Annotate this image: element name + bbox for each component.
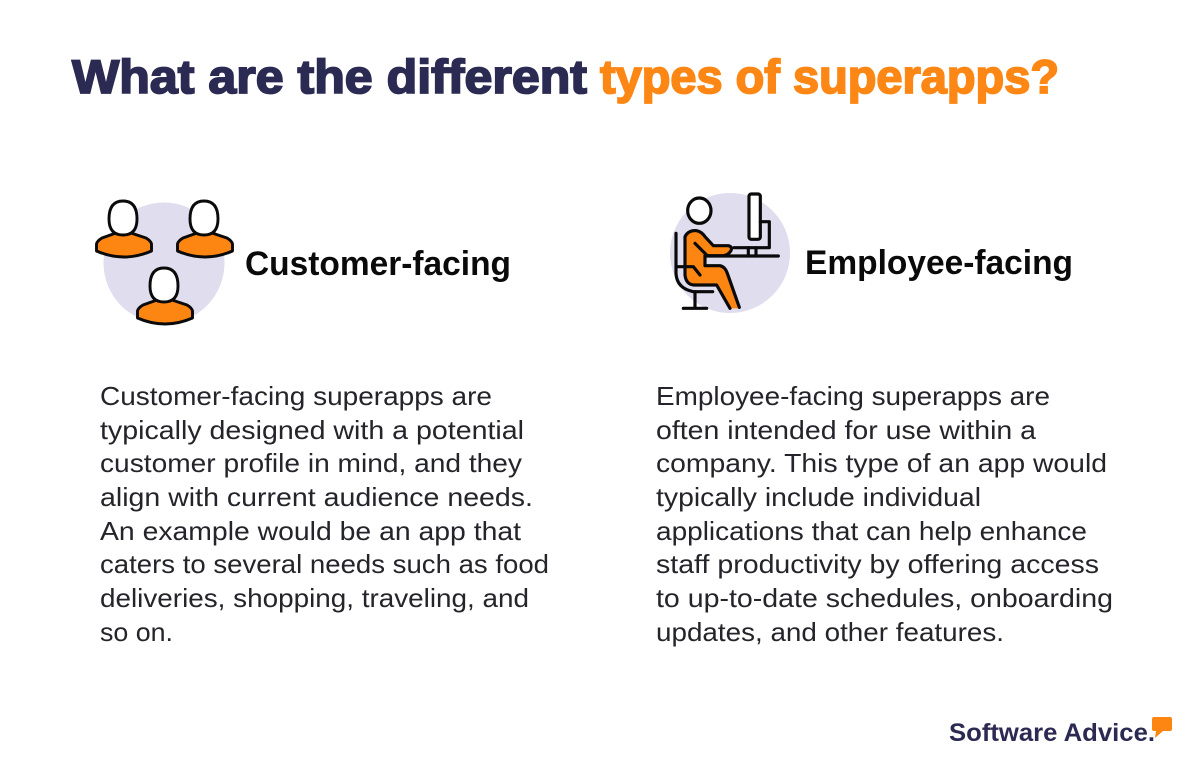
- heading: employee-facing: Employee-facing: [805, 244, 1073, 282]
- text block: employee-facing description: staff productivity by offering access: [656, 549, 1099, 579]
- text block: employee-facing description: often intended for use within a: [656, 415, 1037, 445]
- icon: employee at desk: [670, 193, 790, 313]
- title: What are the different: [72, 50, 587, 103]
- text block: employee-facing description: to up-to-date schedules, onboarding: [656, 583, 1113, 613]
- text block: employee-facing description: company. This type of an app would: [656, 448, 1107, 478]
- text block: customer-facing description: caters to several needs such as food: [100, 549, 549, 579]
- icon: customers: [96, 201, 232, 324]
- title: types of superapps?: [600, 50, 1059, 103]
- text block: customer-facing description: customer profile in mind, and they: [100, 448, 522, 478]
- title: [72, 50, 1059, 103]
- text block: customer-facing description: align with current audience needs.: [100, 482, 533, 512]
- text block: employee-facing description: updates, and other features.: [656, 617, 1004, 647]
- text block: customer-facing description: An example would be an app that: [100, 516, 522, 546]
- text block: employee-facing description: applications that can help enhance: [656, 516, 1087, 546]
- text block: employee-facing description: [656, 381, 1113, 647]
- text block: customer-facing description: Customer-facing superapps are: [100, 381, 492, 411]
- text block: employee-facing description: Employee-facing superapps are: [656, 381, 1050, 411]
- text block: customer-facing description: deliveries, shopping, traveling, and: [100, 583, 529, 613]
- text block: customer-facing description: so on.: [100, 617, 173, 647]
- text block: employee-facing description: typically include individual: [656, 482, 981, 512]
- text block: customer-facing description: typically designed with a potential: [100, 415, 524, 445]
- heading: customer-facing: Customer-facing: [245, 245, 511, 283]
- text block: customer-facing description: [100, 381, 549, 647]
- logo: Software Advice: Software Advice.: [949, 719, 1155, 747]
